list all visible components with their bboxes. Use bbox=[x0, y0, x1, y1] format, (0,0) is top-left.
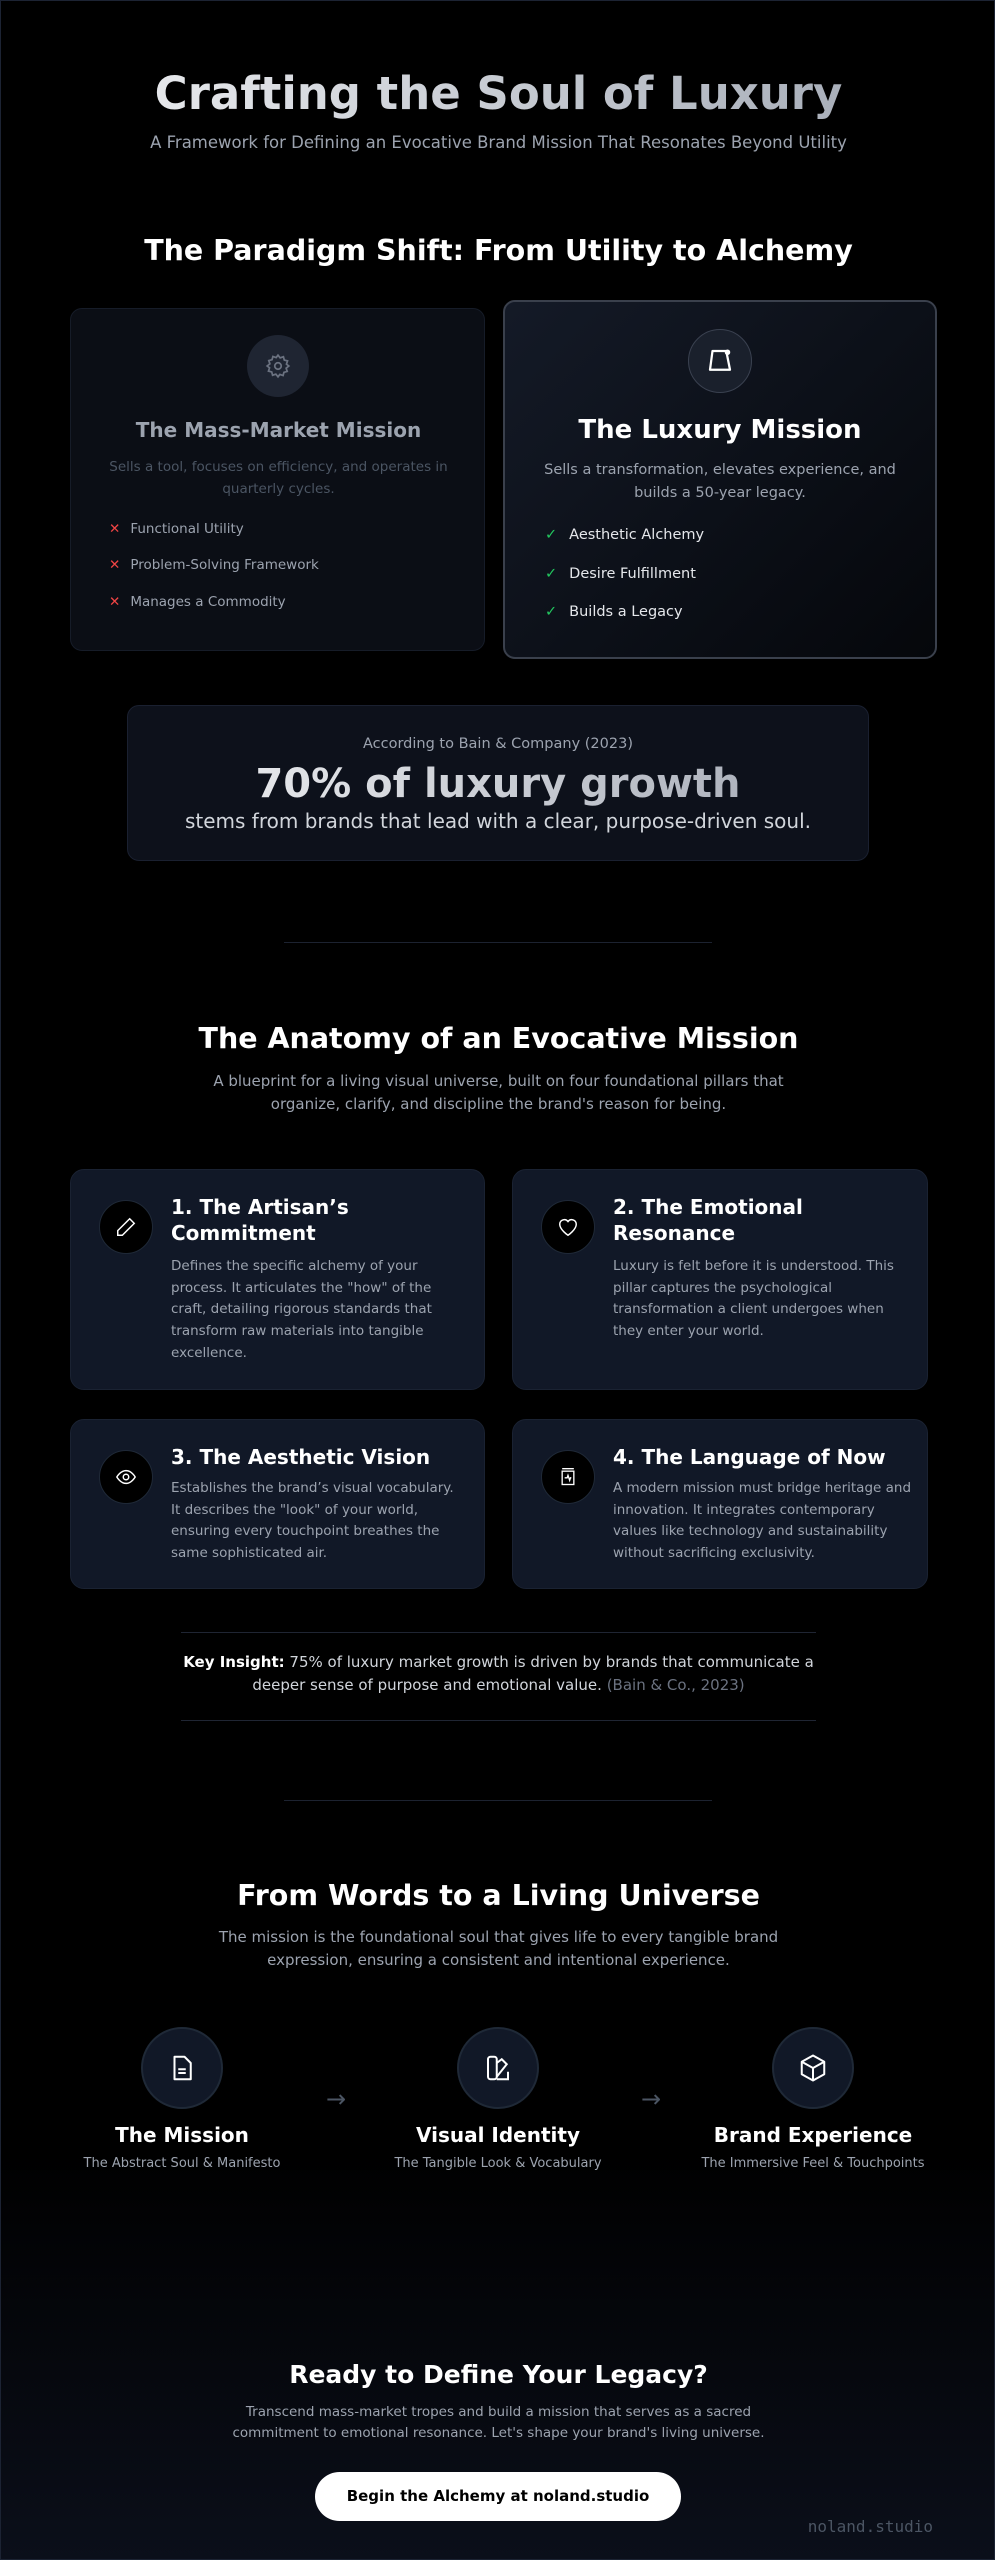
heading: 3. The Aesthetic Vision bbox=[171, 1445, 430, 1469]
arrow: → bbox=[326, 2085, 346, 2113]
stat bbox=[128, 758, 868, 810]
flow step: visual identity: The Tangible Look & Vocabulary bbox=[394, 2156, 602, 2171]
text: Establishes the brand’s visual vocabulary. It describes the "look" of your world, ensuring every touchpoint breathes the same sophisticated air. bbox=[171, 1480, 454, 1561]
heading: The Luxury Mission bbox=[578, 415, 862, 445]
section description bbox=[213, 1072, 784, 1113]
section description: organize, clarify, and discipline the brand's reason for being. bbox=[271, 1095, 726, 1113]
stat: 70% of luxury growth bbox=[255, 761, 741, 807]
CTA text: Transcend mass-market tropes and build a mission that serves as a sacred bbox=[246, 2404, 751, 2420]
key insight callout: deeper sense of purpose and emotional value. (Bain & Co., 2023) bbox=[252, 1676, 745, 1694]
heading: 4. The Language of Now bbox=[613, 1445, 886, 1469]
icon: calendar pulse bbox=[541, 1450, 595, 1504]
flow step: mission: The Mission bbox=[115, 2123, 249, 2147]
panel: luxury mission bbox=[503, 300, 937, 659]
icon: eye bbox=[99, 1450, 153, 1504]
title: Crafting the Soul of Luxury bbox=[155, 67, 842, 120]
panel: pillar 1 bbox=[70, 1169, 485, 1390]
flow step: visual identity: Visual Identity bbox=[416, 2123, 580, 2147]
section description: The mission is the foundational soul that gives life to every tangible brand bbox=[219, 1928, 778, 1946]
CTA button bbox=[315, 2472, 681, 2521]
heading: 2. The Emotional bbox=[613, 1195, 803, 1219]
source: According to Bain & Company (2023) bbox=[363, 736, 633, 752]
heading: Commitment bbox=[171, 1221, 316, 1245]
key insight callout bbox=[183, 1653, 814, 1694]
icon: gear bbox=[247, 335, 309, 397]
flow step: brand experience: The Immersive Feel & Touchpoints bbox=[701, 2156, 925, 2171]
footer brand: noland.studio bbox=[808, 2517, 933, 2536]
panel: mass-market mission: ✕ Manages a Commodity bbox=[109, 594, 286, 610]
icon: document bbox=[141, 2027, 223, 2109]
panel: mass-market mission bbox=[70, 308, 485, 651]
flow step: visual identity bbox=[394, 2027, 602, 2171]
key insight callout: Key Insight: 75% of luxury market growth is driven by brands that communicate a bbox=[183, 1653, 814, 1671]
CTA button: Begin the Alchemy at noland.studio bbox=[347, 2487, 649, 2505]
panel: luxury mission: ✓ Aesthetic Alchemy bbox=[545, 527, 704, 543]
icon: swatches bbox=[457, 2027, 539, 2109]
text: Defines the specific alchemy of your process. It articulates the "how" of the craft, detailing rigorous standards that transform raw materials into tangible excellence. bbox=[171, 1258, 432, 1361]
panel: pillar 2 bbox=[512, 1169, 928, 1390]
heading: Resonance bbox=[613, 1221, 735, 1245]
icon: cube bbox=[772, 2027, 854, 2109]
panel: mass-market mission: ✕ Functional Utility bbox=[109, 521, 244, 537]
flow step: mission: The Abstract Soul & Manifesto bbox=[84, 2156, 280, 2171]
flow step: brand experience bbox=[701, 2027, 925, 2171]
heading bbox=[171, 1195, 349, 1245]
subtitle: A Framework for Defining an Evocative Brand Mission That Resonates Beyond Utility bbox=[150, 133, 847, 152]
CTA heading: Ready to Define Your Legacy? bbox=[289, 2360, 708, 2389]
section heading: anatomy: The Anatomy of an Evocative Mission bbox=[198, 1022, 798, 1055]
panel: pillar 4 bbox=[512, 1419, 928, 1589]
text: A modern mission must bridge heritage and innovation. It integrates contemporary values like technology and sustainability without sacrificing exclusivity. bbox=[613, 1480, 911, 1561]
callout: statistic bbox=[127, 705, 869, 861]
CTA text bbox=[232, 2404, 765, 2441]
heading: The Mass-Market Mission bbox=[136, 418, 421, 442]
text: Luxury is felt before it is understood. This pillar captures the psychological transformation a client undergoes when they enter your world. bbox=[613, 1258, 894, 1339]
heading bbox=[613, 1195, 803, 1245]
panel: pillar 3 bbox=[70, 1419, 485, 1589]
section heading: living universe: From Words to a Living Universe bbox=[237, 1879, 760, 1912]
description: Sells a tool, focuses on efficiency, and operates in quarterly cycles. bbox=[109, 459, 448, 496]
icon: heart bbox=[541, 1200, 595, 1254]
section heading: paradigm shift: The Paradigm Shift: From Utility to Alchemy bbox=[144, 234, 853, 267]
icon: bag bbox=[688, 329, 752, 393]
panel: mass-market mission: ✕ Problem-Solving Framework bbox=[109, 557, 319, 573]
section description bbox=[218, 1928, 778, 1969]
panel: luxury mission: ✓ Builds a Legacy bbox=[545, 604, 683, 620]
section description: A blueprint for a living visual universe, built on four foundational pillars that bbox=[213, 1072, 784, 1090]
flow step: mission bbox=[83, 2027, 280, 2171]
arrow: → bbox=[641, 2085, 661, 2113]
list: drawbacks bbox=[109, 521, 319, 610]
CTA text: commitment to emotional resonance. Let's shape your brand's living universe. bbox=[232, 2425, 765, 2441]
icon: pencil bbox=[99, 1200, 153, 1254]
title bbox=[1, 64, 995, 124]
stat caption: stems from brands that lead with a clear, purpose-driven soul. bbox=[185, 809, 811, 833]
flow step: brand experience: Brand Experience bbox=[714, 2123, 912, 2147]
description: Sells a transformation, elevates experience, and builds a 50-year legacy. bbox=[544, 462, 896, 501]
panel: luxury mission: ✓ Desire Fulfillment bbox=[545, 566, 696, 582]
list: benefits bbox=[545, 527, 704, 620]
section description: expression, ensuring a consistent and intentional experience. bbox=[267, 1951, 730, 1969]
heading: 1. The Artisan’s bbox=[171, 1195, 349, 1219]
